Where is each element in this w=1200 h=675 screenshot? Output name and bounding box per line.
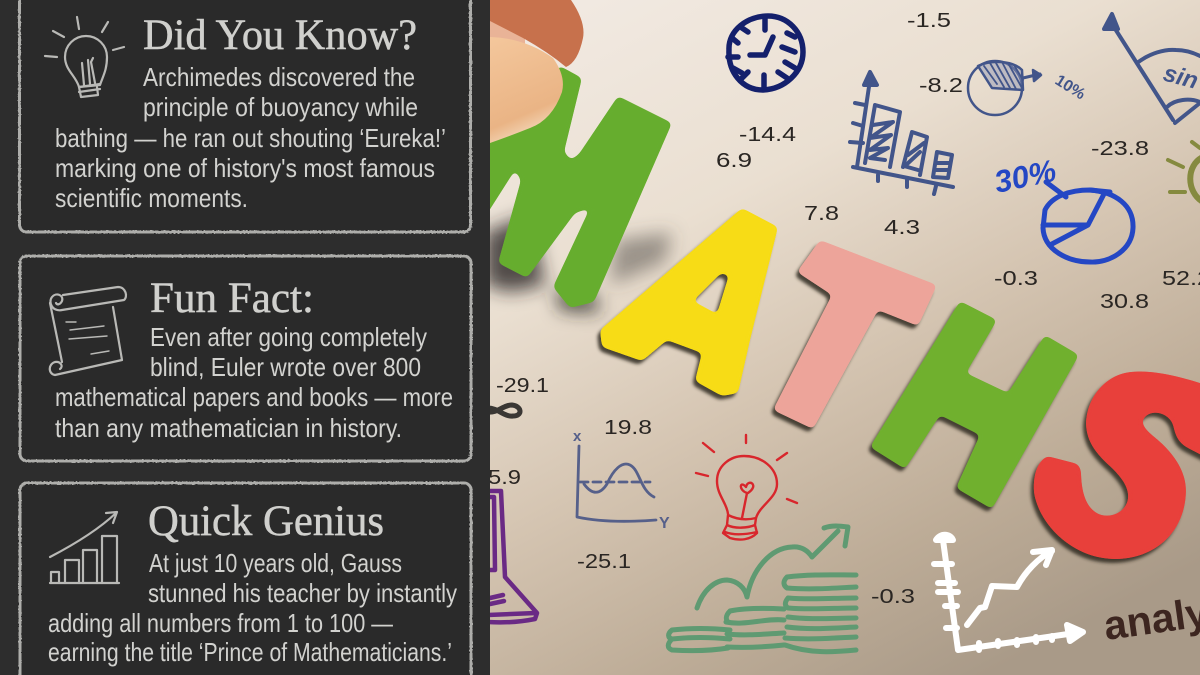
knuckle skin: [490, 20, 525, 45]
text: Archimedes fact: marking one of history's most famous: [55, 153, 435, 183]
letter H (green): [870, 301, 1079, 509]
text: Gauss fact: adding all numbers from 1 to 100 —: [48, 608, 393, 638]
handwritten 30%: 30%: [991, 153, 1059, 200]
text: Euler fact: Even after going completely: [150, 322, 427, 352]
heading: Quick Genius: Quick Genius: [148, 498, 384, 545]
letter M (green, held by fingers): [480, 66, 672, 308]
text: Gauss fact: At just 10 years old, Gauss: [149, 548, 402, 578]
icon: bar chart sketch: [850, 72, 953, 194]
axis label x: x: [573, 428, 582, 445]
photo background: table surface: [490, 0, 1200, 675]
icon: green coin stacks with rising arrow: [668, 526, 856, 652]
text: Archimedes fact: [55, 62, 446, 213]
text: Archimedes fact: principle of buoyancy while: [143, 92, 418, 122]
number -1.5: -1.5: [907, 10, 951, 32]
wooden letters spelling MATHS: [480, 66, 1200, 559]
number 4.3: 4.3: [884, 217, 920, 239]
number -0.3 lower: -0.3: [871, 586, 915, 608]
panel: Quick Genius: [20, 483, 471, 675]
icon: white rising line chart: [934, 535, 1083, 650]
handwritten sin: sin: [1160, 60, 1200, 95]
letter A (yellow): [600, 208, 778, 396]
icon: chalk rising bar chart: [50, 512, 119, 583]
letter T (pink): [773, 240, 937, 429]
hand: fingers holding the M: [490, 0, 584, 143]
text: Archimedes fact: bathing — he ran out shouting ‘Eureka!’: [55, 123, 446, 153]
icon: xy line graph: [573, 428, 670, 532]
number -0.3 upper: -0.3: [994, 268, 1038, 290]
letter S (red): [1034, 372, 1200, 559]
icon: blue pie chart with 30% label: [991, 153, 1133, 262]
icon: angle diagram labelled sin: [1104, 14, 1200, 123]
number 19.8: 19.8: [604, 417, 652, 439]
text: Archimedes fact: scientific moments.: [55, 183, 248, 213]
thumb: [490, 37, 563, 143]
icon: infinity doodle: [488, 405, 520, 416]
text: Archimedes fact: Archimedes discovered the: [143, 62, 415, 92]
scattered numbers: [488, 10, 1200, 608]
icon: hatched pie chart with 10% note: [968, 61, 1088, 115]
heading: Fun Fact:: Fun Fact:: [150, 275, 314, 322]
icon: red light bulb: [696, 435, 797, 540]
icon: purple laptop: [488, 491, 537, 622]
number -29.1: -29.1: [496, 375, 549, 397]
icon: navy clock: [728, 16, 803, 90]
soft shadows under the lifted letter M: [485, 215, 672, 312]
number 6.9: 6.9: [716, 150, 752, 172]
number -8.2: -8.2: [919, 75, 963, 97]
axis label y: Y: [659, 515, 670, 532]
number -14.4: -14.4: [739, 124, 796, 146]
icon: chalk scroll: [50, 287, 126, 375]
text: Euler fact: blind, Euler wrote over 800: [150, 352, 421, 382]
number -25.1: -25.1: [577, 551, 631, 573]
text: Gauss fact: [48, 548, 457, 667]
panel: Fun Fact: [20, 256, 471, 461]
text: Euler fact: [55, 322, 453, 443]
handwritten 10%: 10%: [1052, 72, 1088, 103]
number 7.8: 7.8: [804, 203, 839, 225]
panel: Did You Know: [20, 0, 470, 232]
number 30.8: 30.8: [1100, 291, 1149, 313]
number 5.9: 5.9: [488, 467, 521, 489]
text: Euler fact: than any mathematician in history.: [55, 413, 402, 443]
left chalkboard column: [0, 0, 490, 675]
text: Euler fact: mathematical papers and books — more: [55, 382, 453, 412]
index finger: [490, 0, 584, 67]
text: Gauss fact: earning the title ‘Prince of Mathematicians.’: [48, 637, 452, 667]
number -23.8: -23.8: [1091, 138, 1149, 160]
heading: Did You Know?: Did You Know?: [143, 12, 417, 59]
icon: olive bulb, partly cropped: [1168, 142, 1200, 202]
number 52.2: 52.2: [1162, 268, 1200, 290]
text: Gauss fact: stunned his teacher by instantly: [148, 578, 457, 608]
icon: chalk light bulb: [45, 17, 124, 97]
